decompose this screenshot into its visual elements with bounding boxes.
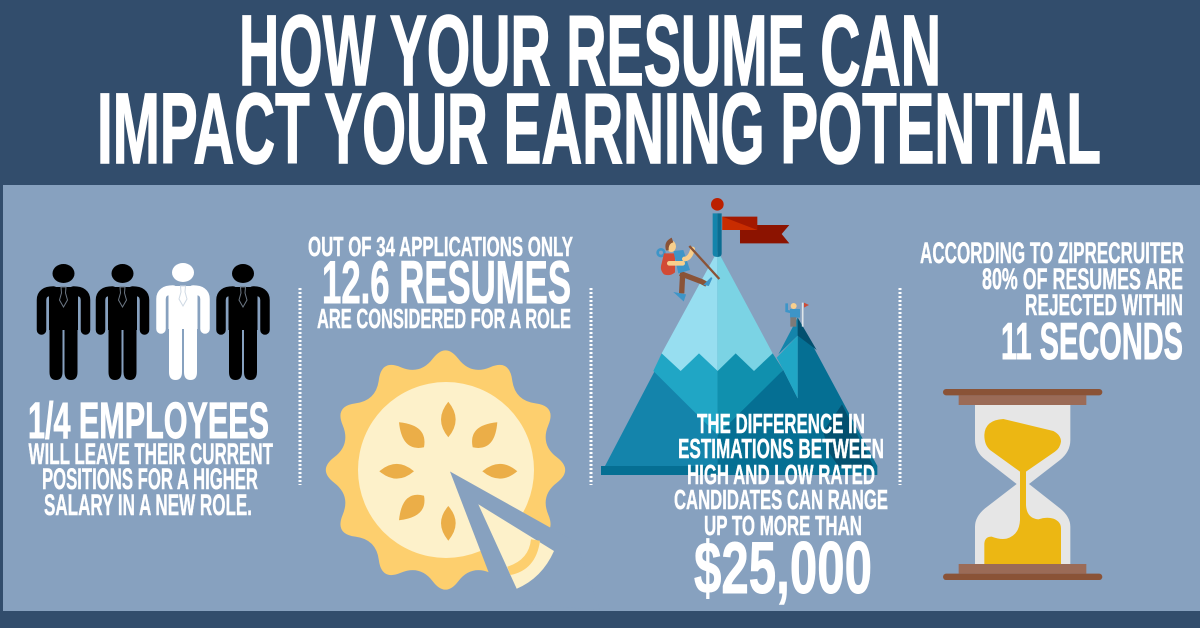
statistic heading: 1/4 employees: 1/4 EMPLOYEES bbox=[28, 392, 269, 449]
panel: applications bbox=[308, 231, 600, 610]
icon: hourglass bbox=[943, 389, 1102, 580]
text block: difference in estimations: UP TO MORE THAN bbox=[704, 510, 862, 541]
text block: employees description bbox=[28, 438, 273, 522]
statistic heading: $25,000: $25,000 bbox=[694, 528, 872, 609]
small climber with flag bbox=[787, 303, 809, 327]
text block: employees description: POSITIONS FOR A HIGHER bbox=[42, 463, 258, 496]
icon: mountains with climbers and flag bbox=[601, 198, 877, 475]
icon: pie with slice cut out bbox=[326, 350, 600, 610]
text block: difference in estimations: CANDIDATES CAN RANGE bbox=[674, 484, 888, 515]
text block: employees description: SALARY IN A NEW ROLE. bbox=[44, 489, 252, 522]
flag pole, ball and flag bbox=[711, 198, 789, 257]
panel: salary difference bbox=[601, 198, 888, 609]
statistic heading: 12.6 resumes: 12.6 RESUMES bbox=[322, 249, 571, 316]
text block: employees description: WILL LEAVE THEIR CURRENT bbox=[28, 438, 273, 471]
text block: difference in estimations: ESTIMATIONS BETWEEN bbox=[678, 433, 884, 464]
text block: difference in estimations bbox=[674, 408, 888, 541]
panel: rejection time bbox=[920, 237, 1184, 580]
text block: applications intro: OUT OF 34 APPLICATIONS ONLY bbox=[308, 231, 573, 262]
panel: employees bbox=[28, 263, 273, 522]
text block: difference in estimations: HIGH AND LOW RATED bbox=[687, 459, 875, 490]
text block: ziprecruiter statistic bbox=[920, 237, 1184, 322]
text block: difference in estimations: THE DIFFERENCE IN bbox=[697, 408, 865, 439]
text block: considered for a role: ARE CONSIDERED FOR A ROLE bbox=[317, 303, 571, 334]
icon: four business people, one white bbox=[42, 263, 265, 380]
climber with backpack bbox=[658, 238, 719, 300]
title bbox=[97, 0, 1101, 185]
